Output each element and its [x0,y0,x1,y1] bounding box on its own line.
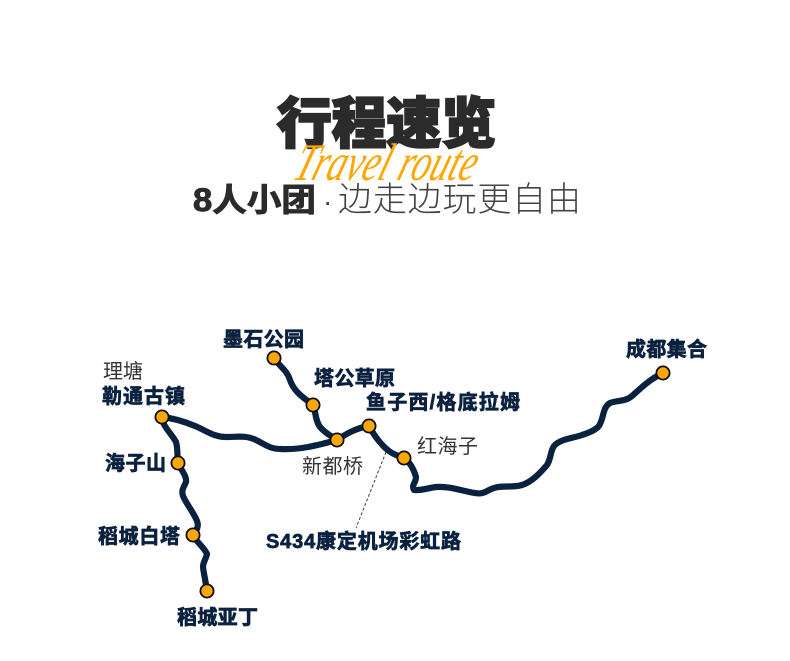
subtitle [193,181,581,219]
place labels: 红海子 [417,435,478,458]
place labels [98,329,707,629]
place labels: 理塘 [103,360,143,383]
subtitle: · [323,186,332,217]
route map [98,329,707,629]
connector: S434 road [356,452,386,528]
place labels: 墨石公园 [223,329,304,351]
place labels: 勒通古镇 [102,385,185,408]
place labels: 稻城亚丁 [177,606,258,629]
subtitle: 8人小团 [193,182,316,218]
place labels: S434康定机场彩虹路 [266,529,461,553]
place labels: 鱼子西/格底拉姆 [366,390,520,414]
route line [162,358,663,591]
stop markers [155,351,670,598]
place labels: 塔公草原 [314,367,395,390]
title: 行程速览 [277,93,496,155]
subtitle english script: Travel route [287,133,487,192]
place labels: 海子山 [105,452,166,475]
place labels: 稻城白塔 [98,525,180,548]
place labels: 成都集合 [626,337,707,361]
place labels: 新都桥 [302,455,363,478]
subtitle: 边走边玩更自由 [338,181,581,219]
